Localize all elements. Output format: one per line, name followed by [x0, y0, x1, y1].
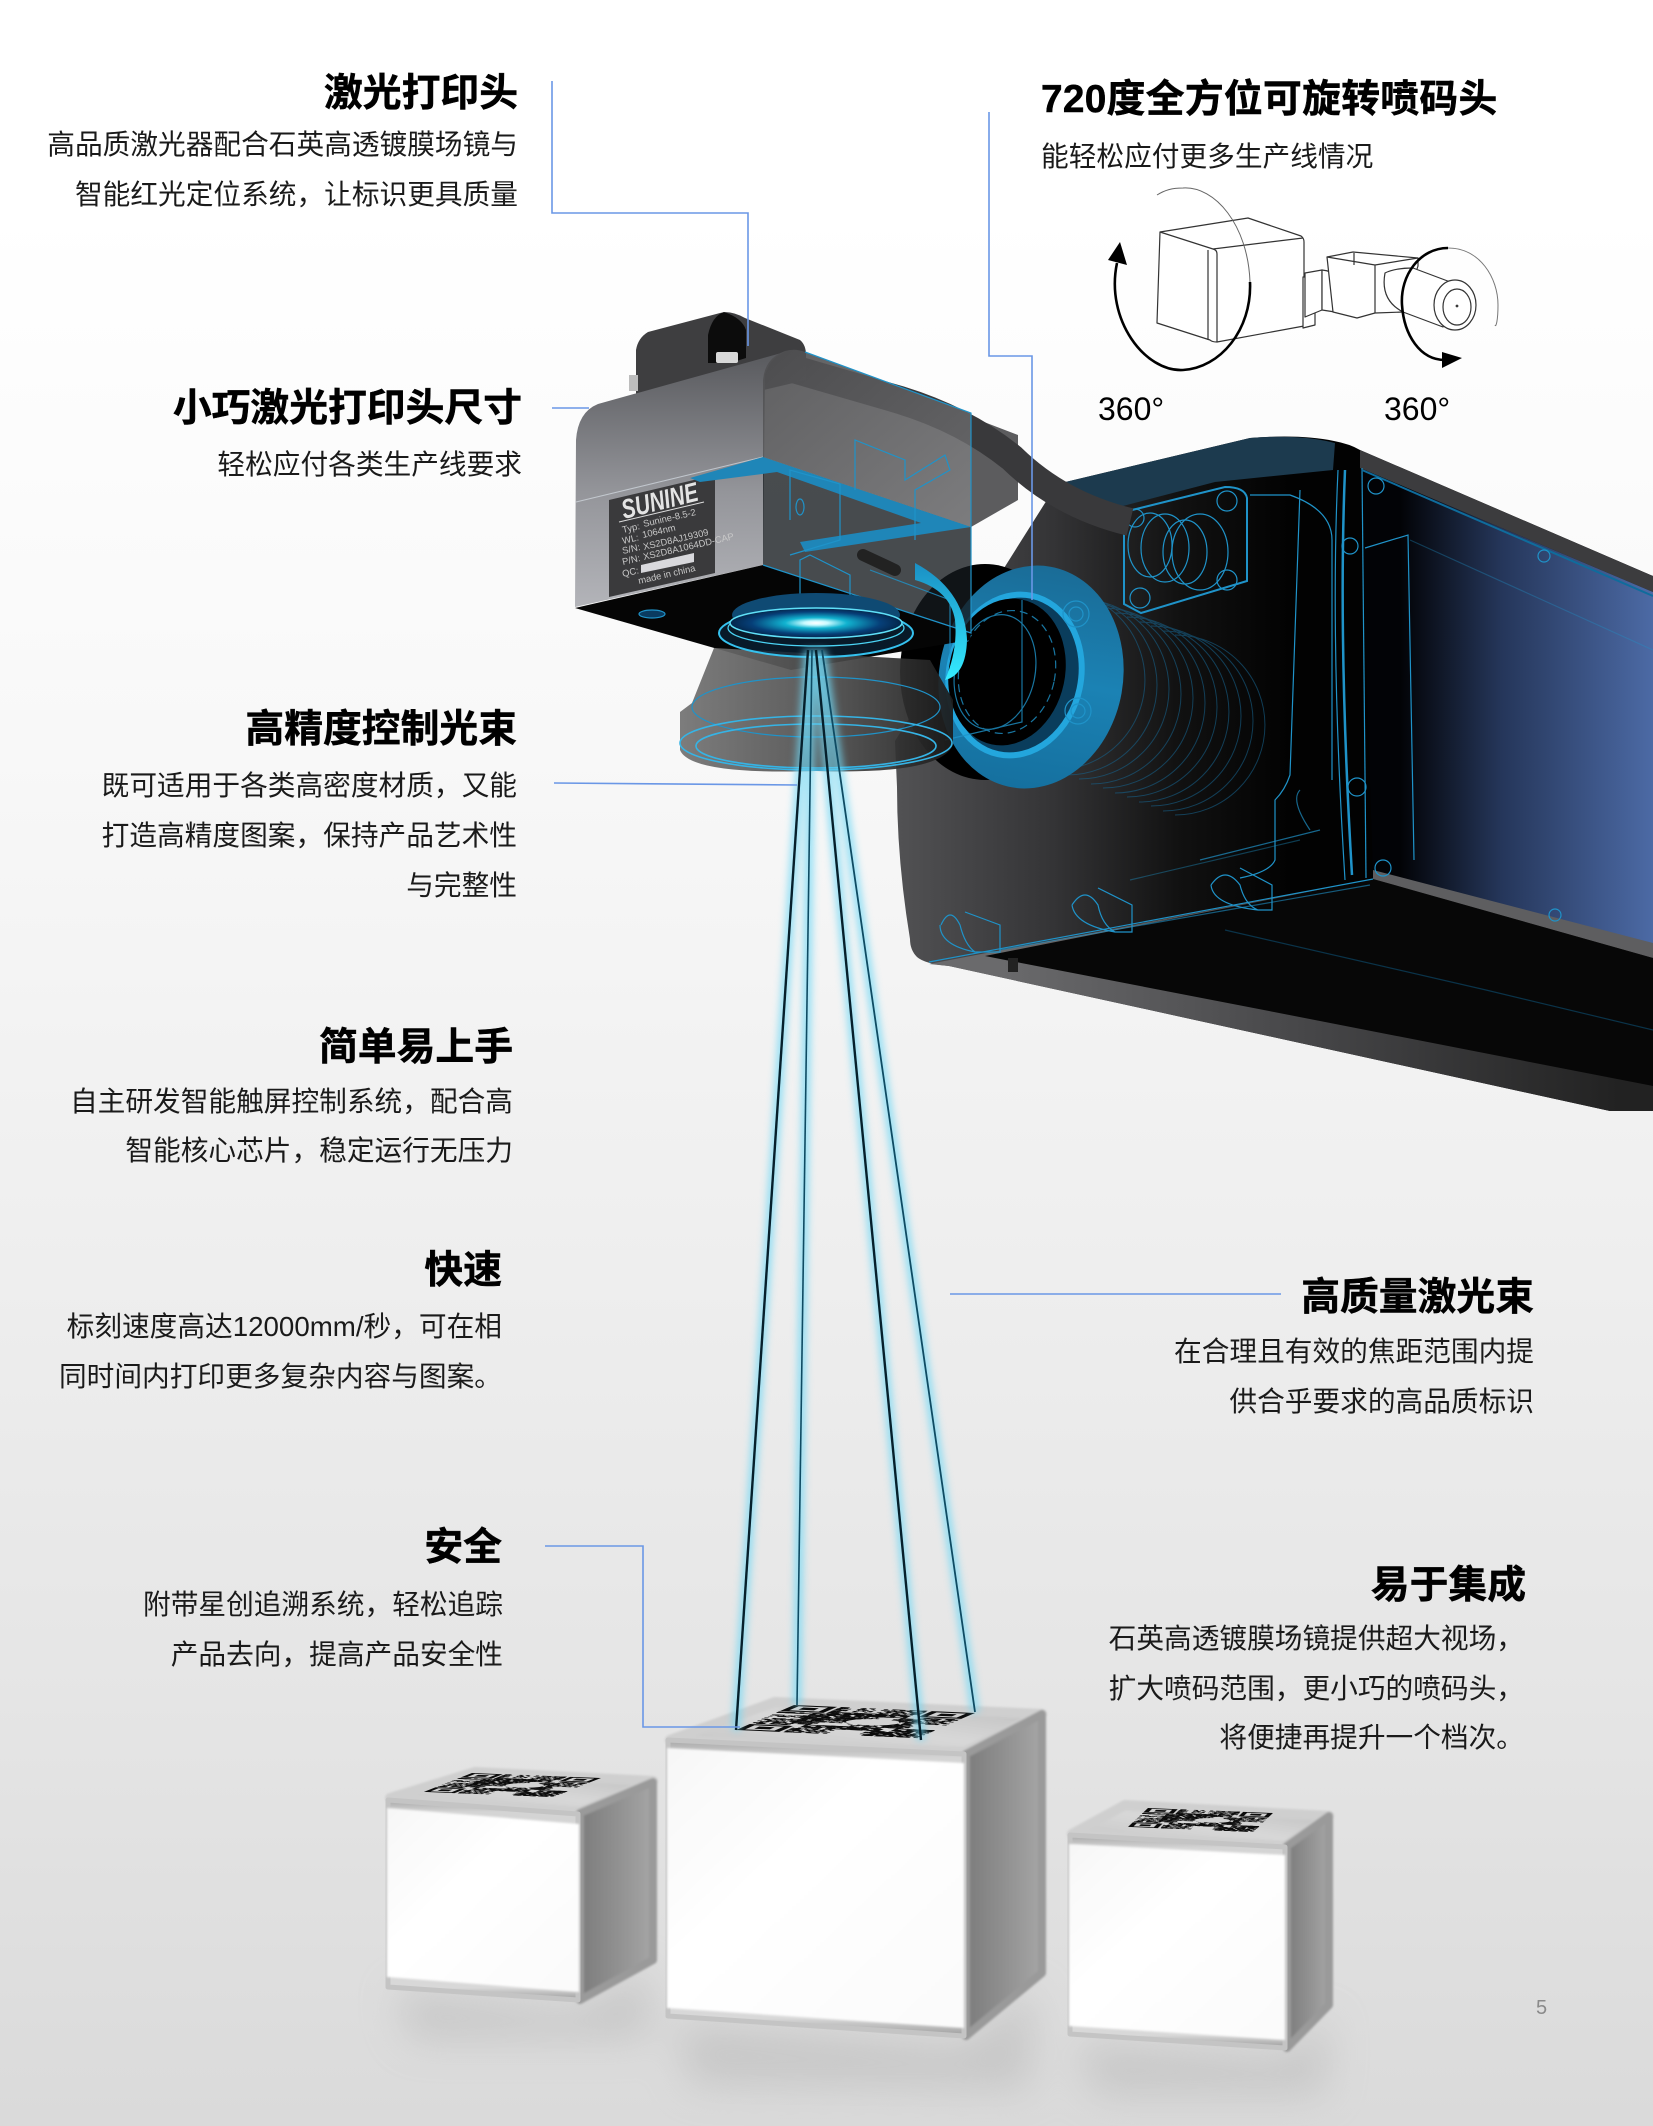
text: compact head size: 小巧激光打印头尺寸 [173, 387, 522, 430]
text: high quality beam [1174, 1276, 1534, 1417]
text: high quality beam: 供合乎要求的高品质标识 [1229, 1386, 1534, 1417]
label lines: Typ: [621, 520, 641, 535]
ring hole wireframe [944, 600, 1067, 743]
text: laser print head: 智能红光定位系统，让标识更具质量 [75, 179, 518, 210]
label logo: SUNINE [618, 477, 702, 525]
text: fast: 快速 [424, 1249, 502, 1292]
text: easy to use [70, 1026, 513, 1166]
callout line: laser quality [950, 1293, 1281, 1295]
lens inner ring [728, 610, 904, 646]
label lines: WL: [621, 531, 640, 546]
cooling ribs [1055, 590, 1265, 815]
bracket dark slot [708, 312, 746, 363]
text: safety [143, 1526, 503, 1670]
ring inner bright lip [934, 582, 1096, 768]
label lines: made in china [637, 562, 697, 586]
cyan crescent [915, 563, 967, 680]
QR code on middle cube [731, 1704, 980, 1739]
callout line: print head [552, 81, 748, 346]
small lens hardware [863, 555, 895, 570]
text: easy integration: 将便捷再提升一个档次。 [1219, 1722, 1524, 1753]
beam core lines [736, 650, 975, 1740]
label lines: XS2D8AJ19309 [642, 526, 709, 552]
text: high quality beam: 在合理且有效的焦距范围内提 [1174, 1336, 1534, 1367]
text: rotating head: 720度全方位可旋转喷码头 [1041, 78, 1498, 121]
laser print head [575, 312, 971, 680]
small foot screw [1008, 958, 1018, 972]
lens barrel top [732, 593, 900, 637]
product label plate [609, 475, 735, 597]
QR code on right cube [1125, 1808, 1276, 1832]
body top translucent strip [1057, 437, 1335, 512]
label lines [621, 506, 735, 586]
bracket screw [716, 352, 738, 363]
label lines: XS2D8A1064DD-CAP [642, 530, 735, 562]
printer machine body [895, 437, 1653, 1111]
label lines: P/N: [621, 552, 641, 567]
cone body [680, 648, 953, 772]
lens glow [730, 608, 902, 638]
cable [790, 368, 1130, 522]
bracket side screw [629, 375, 638, 391]
text: high precision: 打造高精度图案，保持产品艺术性 [102, 820, 517, 851]
body outer shell [895, 437, 1653, 1111]
label lines: QC: [621, 564, 640, 579]
left cube [387, 1772, 653, 2000]
ring inner hole [935, 588, 1079, 756]
text: high quality beam: 高质量激光束 [1301, 1276, 1534, 1319]
callout line: safety [545, 1546, 740, 1727]
text: compact head size [173, 387, 522, 480]
right rotation arrow [1402, 248, 1498, 368]
text: high precision: 与完整性 [406, 870, 517, 901]
QC white bar [641, 553, 694, 573]
connector plate [1124, 487, 1247, 613]
label lines: S/N: [621, 541, 641, 556]
diagram laser box [1157, 218, 1315, 342]
right cube [1069, 1805, 1329, 2048]
callout line: compact size [552, 407, 589, 409]
text: rotating head: 能轻松应付更多生产线情况 [1041, 141, 1373, 172]
text: easy to use: 简单易上手 [319, 1026, 513, 1069]
text: high precision [102, 708, 517, 901]
text: compact head size: 轻松应付各类生产线要求 [217, 449, 522, 480]
cube shadows [395, 1968, 1328, 2095]
text: fast: 同时间内打印更多复杂内容与图案。 [59, 1361, 502, 1392]
callout line: rotating head [989, 112, 1032, 600]
page number: 5 [1536, 1997, 1547, 2019]
laser beams [736, 650, 975, 1740]
text: easy to use: 智能核心芯片，稳定运行无压力 [125, 1135, 513, 1166]
head translucent lower face [763, 457, 971, 633]
text: easy integration: 扩大喷码范围，更小巧的喷码头， [1109, 1673, 1524, 1704]
text: laser print head: 高品质激光器配合石英高透镀膜场镜与 [47, 129, 518, 160]
blue side panel [1360, 468, 1653, 945]
head translucent right upper face [763, 350, 971, 527]
body right upper strip [1360, 450, 1653, 592]
callout lines [545, 81, 1281, 1727]
text: fast [59, 1249, 502, 1392]
blue ring [921, 551, 1141, 803]
diagram nozzle [1305, 252, 1476, 330]
blue frame band [690, 457, 971, 552]
seam on left face [576, 457, 763, 502]
cone wire ellipses [680, 677, 952, 770]
text: rotating head [1041, 78, 1498, 172]
text: easy integration: 石英高透镀膜场镜提供超大视场， [1109, 1623, 1524, 1654]
text: easy integration [1109, 1564, 1526, 1753]
callout line: precision [554, 783, 797, 785]
product cubes [387, 1702, 1329, 2095]
label lines: Sunine-8.5-2 [642, 506, 697, 529]
rear panel behind head [971, 417, 1018, 527]
text: laser print head [47, 72, 518, 210]
rotation diagram [1098, 188, 1498, 427]
underside of body [929, 879, 1653, 1111]
beam glow [736, 650, 975, 1740]
head left face [575, 352, 785, 607]
dark housing behind ring [900, 564, 1070, 780]
middle cube [667, 1702, 1042, 2036]
body screws [1342, 478, 1561, 921]
label: left 360: 360° [1098, 391, 1164, 427]
text: high precision: 既可适用于各类高密度材质，又能 [102, 770, 517, 801]
text: fast: 标刻速度高达12000mm/秒，可在相 [67, 1311, 502, 1342]
QR code on left cube [421, 1773, 604, 1797]
text: safety: 安全 [424, 1526, 502, 1569]
left rotation arrow [1108, 188, 1250, 370]
text: easy to use: 自主研发智能触屏控制系统，配合高 [70, 1086, 513, 1117]
label: right 360: 360° [1384, 391, 1450, 427]
lower lens cone [680, 648, 953, 772]
lens outer ring [719, 609, 913, 657]
label lines: 1064nm [641, 522, 677, 540]
text: laser print head: 激光打印头 [324, 72, 518, 115]
text: easy integration: 易于集成 [1371, 1564, 1526, 1607]
right lower strip [1373, 870, 1653, 960]
text: safety: 产品去向，提高产品安全性 [171, 1639, 503, 1670]
nozzle ring assembly [900, 551, 1141, 803]
underside dark plate [985, 879, 1653, 1086]
head mount bracket [636, 312, 806, 420]
head wireframe [639, 352, 971, 660]
head underside [575, 565, 971, 670]
logo underline [619, 502, 704, 522]
top lens [719, 593, 913, 657]
ring screws [1063, 601, 1091, 724]
bottom mounting slots [940, 868, 1272, 952]
body wireframe details [929, 468, 1653, 1030]
text: safety: 附带星创追溯系统，轻松追踪 [143, 1589, 503, 1620]
text: high precision: 高精度控制光束 [245, 708, 517, 751]
